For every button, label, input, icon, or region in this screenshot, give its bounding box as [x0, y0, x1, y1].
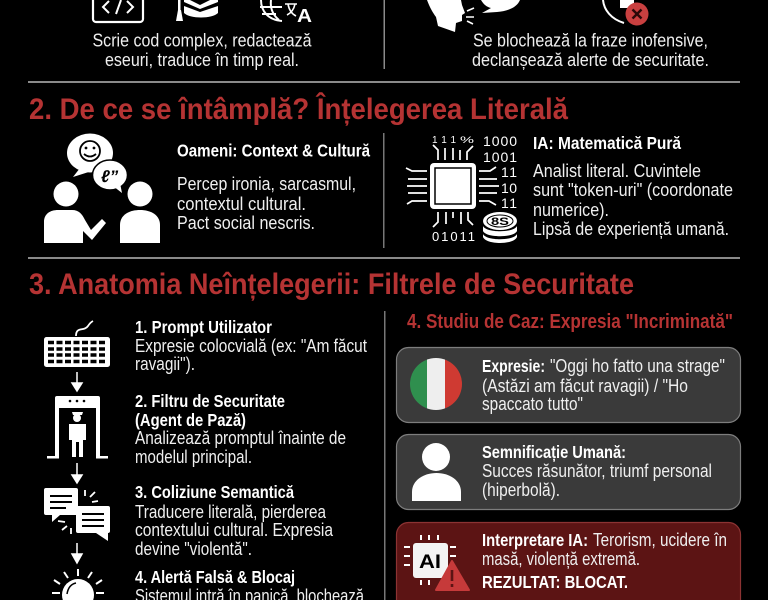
step 3: devine "violentă".: [135, 539, 252, 559]
icon: globe and translation: A: [297, 6, 312, 26]
icon: person: [412, 443, 461, 501]
step 2: [135, 391, 346, 467]
icon: colliding bubbles: [44, 488, 110, 541]
step 3: Traducere literală, pierderea: [135, 502, 327, 522]
panel: filter flow: [44, 317, 367, 600]
step 3: 3. Coliziune Semantică: [135, 482, 294, 502]
heading: section 2: 2. De ce se întâmplă? Înțelegerea Literală: [29, 92, 568, 126]
icon: speech bubble: [481, 0, 520, 13]
icon: AI chip warning: AI: [419, 552, 441, 573]
icon: people talking: [44, 134, 160, 243]
text: expression: spaccato tutto": [482, 394, 583, 414]
text: humans body: contextul cultural.: [177, 194, 306, 214]
card: human meaning: [396, 434, 740, 510]
text: human meaning: Semnificație Umană:: [482, 442, 626, 462]
text: AI body: sunt "token-uri" (coordonate: [533, 180, 733, 200]
text: AI interpretation: Terorism, ucidere în: [593, 530, 727, 550]
icon: chip with binary: 10: [501, 180, 517, 196]
icon: speaking head: [427, 0, 474, 32]
panel: humans: [44, 134, 370, 243]
text: humans body: Pact social nescris.: [177, 213, 315, 233]
arrow: [72, 543, 82, 563]
icon: chip with binary: 11: [501, 195, 517, 211]
step 3: [135, 482, 334, 559]
step 2: (Agent de Pază): [135, 410, 246, 430]
step 2: Analizează promptul înainte de: [135, 428, 346, 448]
panel: failures: [427, 0, 709, 70]
text: AI interpretation: masă, violență extremă.: [482, 549, 640, 569]
step 3: contextului cultural. Expresia: [135, 520, 334, 540]
text: failures caption: declanșează alerte de securitate.: [472, 50, 709, 70]
text: AI body: Lipsă de experiență umană.: [533, 219, 729, 239]
text: capabilities caption: Scrie cod complex, redactează: [92, 30, 312, 50]
step 2: 2. Filtru de Securitate: [135, 391, 285, 411]
arrow: [72, 372, 82, 391]
text: expression: "Oggi ho fatto una strage": [550, 356, 725, 376]
step 1: [135, 317, 367, 374]
icon: chip with binary: 1000: [483, 133, 517, 149]
text: human meaning: Succes răsunător, triumf personal: [482, 461, 712, 481]
text: AI interpretation: [482, 530, 727, 592]
text: human meaning: (hiperbolă).: [482, 480, 560, 500]
heading: section 3: 3. Anatomia Neînțelegerii: Filtrele de Securitate: [29, 268, 634, 301]
text: expression: Expresie:: [482, 356, 545, 376]
text: capabilities caption: eseuri, traduce în timp real.: [105, 50, 299, 70]
icon: people talking: ℓ”: [101, 167, 119, 186]
text: AI interpretation: Interpretare IA:: [482, 530, 588, 550]
icon: chip with binary: %: [460, 135, 474, 145]
step 2: modelul principal.: [135, 447, 252, 467]
card: expression: [396, 348, 740, 422]
text: humans body: Percep ironia, sarcasmul,: [177, 174, 356, 194]
card: AI interpretation: [396, 522, 740, 600]
icon: code window: [93, 0, 143, 22]
icon: chip with binary: 01011: [432, 229, 475, 244]
text: expression: (Astăzi am făcut ravagii) / "Ho: [482, 376, 688, 396]
step 4: [135, 567, 365, 600]
text: expression: [482, 356, 725, 414]
step 1: 1. Prompt Utilizator: [135, 317, 272, 337]
text: AI body: numerice).: [533, 200, 609, 220]
icon: AI chip warning: [404, 535, 469, 590]
text: AI interpretation: REZULTAT: BLOCAT.: [482, 572, 628, 592]
icon: graduation cap: [176, 0, 218, 21]
icon: chip with binary: 1001: [483, 149, 517, 165]
icon: chip with binary: [406, 133, 517, 244]
icon: chip with binary: 11: [501, 164, 517, 180]
icon: chip with binary: 111: [432, 135, 456, 146]
icon: alert bulb: [52, 569, 104, 600]
icon: chip with binary: 8S: [491, 216, 509, 228]
step 4: 4. Alertă Falsă & Blocaj: [135, 567, 295, 587]
text: failures caption: Se blochează la fraze inofensive,: [473, 30, 708, 50]
arrow: [72, 463, 82, 483]
icon: Italian flag: [410, 358, 463, 410]
panel: AI: [406, 133, 733, 244]
text: AI body: [533, 161, 733, 239]
text: humans body: [177, 174, 356, 233]
icon: blocked shield: [603, 0, 648, 26]
text: AI heading: IA: Matematică Pură: [533, 133, 681, 153]
step 1: Expresie colocvială (ex: "Am făcut: [135, 336, 367, 356]
text: failures caption: [472, 30, 709, 70]
icon: security gate: [47, 396, 108, 458]
text: capabilities caption: [92, 30, 312, 70]
step 1: ravagii").: [135, 354, 195, 374]
icon: globe and translation: [260, 0, 312, 26]
text: human meaning: [482, 442, 712, 500]
panel: capabilities: [92, 0, 312, 70]
icon: keyboard: [44, 321, 110, 367]
text: AI body: Analist literal. Cuvintele: [533, 161, 701, 181]
text: humans heading: Oameni: Context & Cultură: [177, 140, 370, 160]
